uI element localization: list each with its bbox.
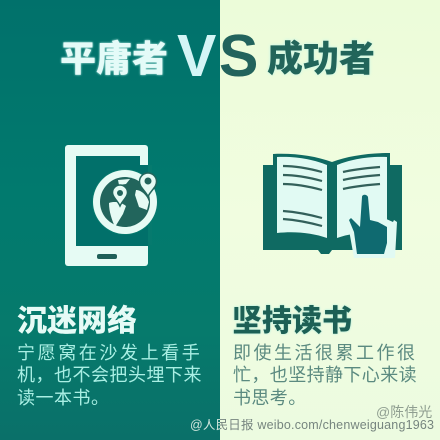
map pins bbox=[112, 173, 156, 206]
heading: right: 坚持读书 bbox=[232, 305, 352, 338]
title: left label: 平庸者 bbox=[60, 38, 168, 79]
title: VS left letter: V bbox=[177, 23, 216, 89]
panel: right cream background bbox=[220, 0, 440, 440]
globe bbox=[92, 169, 158, 235]
hand pointer bbox=[346, 191, 397, 258]
title: right label: 成功者 bbox=[267, 38, 375, 79]
phone body bbox=[65, 145, 152, 266]
icon: phone with globe bbox=[65, 145, 158, 266]
text block: right description: 书思考。 bbox=[233, 388, 307, 408]
heading: left: 沉迷网络 bbox=[17, 305, 137, 338]
text block: left description: 宁愿窝在沙发上看手 bbox=[17, 343, 202, 363]
text block: left description: 读一本书。 bbox=[17, 388, 110, 408]
text block: left description: 机，也不会把头埋下来 bbox=[17, 365, 202, 385]
book bbox=[263, 153, 402, 254]
text block: right description: 即使生活很累工作很 bbox=[233, 343, 418, 363]
text block: right description: 忙，也坚持静下心来读 bbox=[233, 365, 417, 385]
icon: open book with hand bbox=[263, 153, 402, 258]
text block: left description bbox=[17, 343, 202, 408]
title: VS right letter: S bbox=[219, 23, 258, 89]
footer: watermark handle: @陈伟光 bbox=[376, 404, 432, 420]
panel: left teal background bbox=[0, 0, 220, 440]
text block: right description bbox=[233, 343, 418, 408]
